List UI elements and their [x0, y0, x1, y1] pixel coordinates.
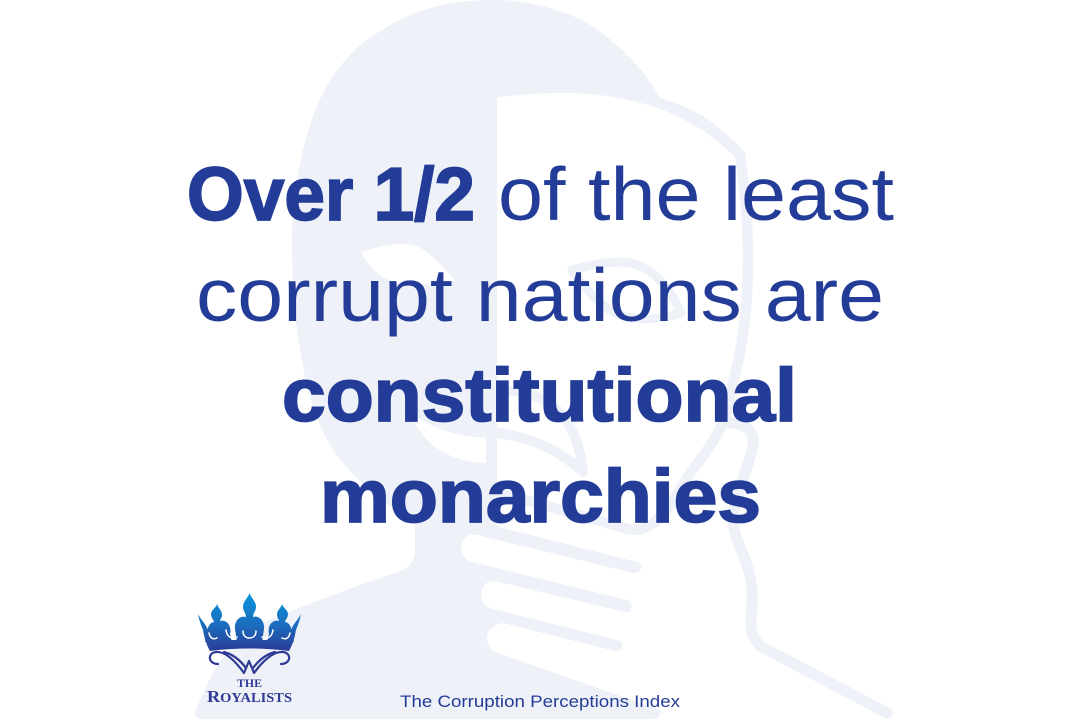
- logo: The Royalists crown: [198, 593, 301, 706]
- logo wordmark: ROYALISTS: [207, 687, 292, 706]
- headline line 3: constitutional: [282, 353, 797, 437]
- headline line 2: corrupt nations are: [196, 253, 884, 337]
- crown flourish: [210, 652, 289, 673]
- logo wordmark: THE: [237, 678, 262, 690]
- silhouette: filled head, neck and shoulder with hand fingers: [195, 0, 745, 719]
- right eye outline: [572, 262, 681, 319]
- headline line 4: monarchies: [320, 454, 761, 538]
- mouth crescent cut-out: [410, 412, 486, 463]
- right face and jaw outline: [497, 155, 748, 530]
- headline line 1: bold part: Over 1/2: [187, 152, 475, 236]
- logo wordmark: [207, 678, 292, 706]
- crown: [198, 593, 301, 651]
- source line: The Corruption Perceptions Index: [400, 692, 681, 711]
- headline: [187, 152, 894, 538]
- lower lip outline: [497, 390, 583, 472]
- headline line 1: regular part: of the least: [498, 152, 894, 236]
- crown highlights: [209, 630, 290, 639]
- background silhouette: half-filled face: [195, 0, 887, 719]
- neck and shoulder outline: [730, 423, 887, 713]
- left eye cut-out: [361, 244, 455, 284]
